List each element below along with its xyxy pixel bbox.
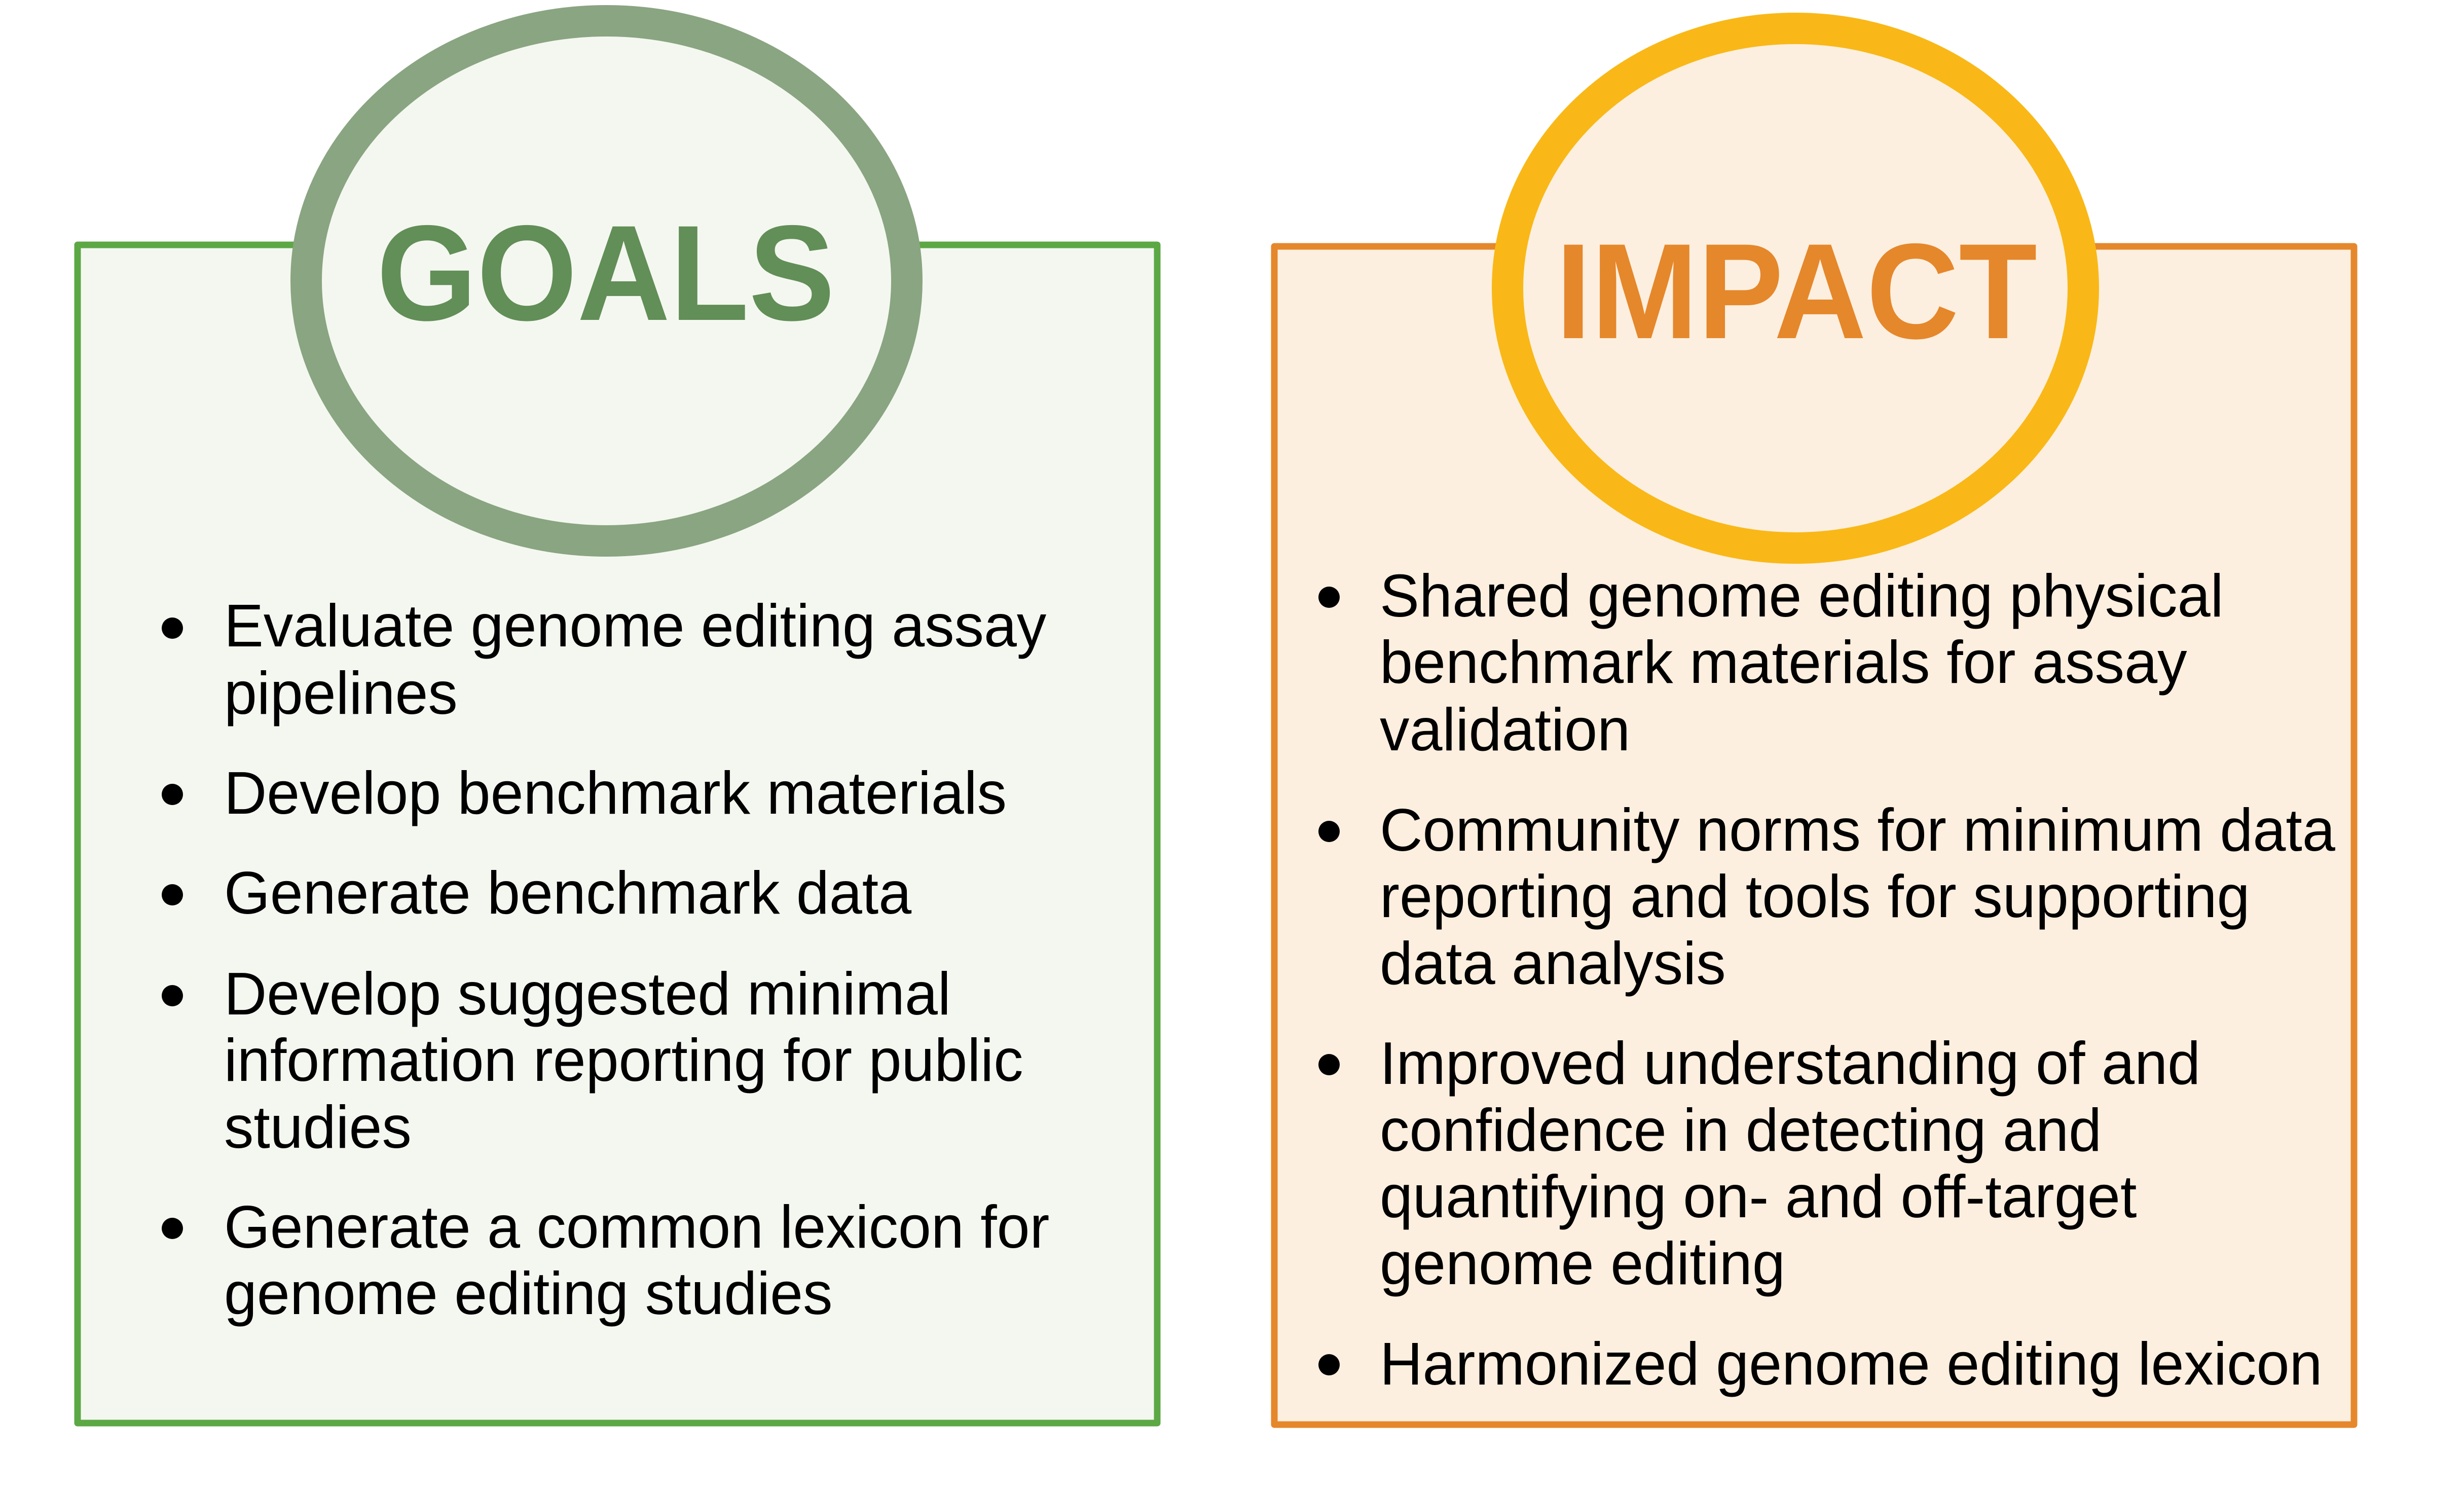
impact 1: Shared genome editing physical: [1380, 562, 2224, 630]
impact 2: data analysis: [1380, 930, 1726, 997]
goal 5: [162, 1193, 1049, 1327]
impact 3: [1318, 1030, 2200, 1297]
goal 5: Generate a common lexicon for: [224, 1193, 1049, 1260]
goal 4: [162, 960, 1023, 1160]
impact heading badge: [1507, 28, 2083, 548]
impact 1: validation: [1380, 696, 1630, 763]
goal 1: [162, 592, 1046, 726]
panel: goals: [78, 21, 1157, 1423]
goal 4: information reporting for public: [224, 1026, 1023, 1094]
goal 4: studies: [224, 1093, 412, 1160]
goal 4: Develop suggested minimal: [224, 960, 951, 1027]
goal 1: Evaluate genome editing assay: [224, 592, 1046, 659]
goals heading badge: [306, 21, 907, 541]
goals bullet list: [162, 592, 1049, 1327]
impact 2: reporting and tools for supporting: [1380, 863, 2250, 930]
goals panel box: [78, 245, 1157, 1423]
panel: impact: [1274, 28, 2354, 1425]
goals heading badge: GOALS: [377, 198, 835, 349]
impact heading badge: IMPACT: [1556, 215, 2037, 368]
goal 3: Generate benchmark data: [224, 859, 912, 926]
impact 1: [1318, 562, 2224, 763]
impact panel box: [1274, 246, 2354, 1425]
impact 2: [1318, 796, 2335, 997]
impact bullet list: [1318, 562, 2335, 1398]
impact 1: benchmark materials for assay: [1380, 629, 2187, 696]
impact 4: Harmonized genome editing lexicon: [1380, 1330, 2323, 1398]
goal 5: genome editing studies: [224, 1259, 832, 1327]
goal 2: Develop benchmark materials: [224, 759, 1007, 826]
impact 3: confidence in detecting and: [1380, 1097, 2102, 1164]
impact 3: genome editing: [1380, 1230, 1785, 1297]
impact 2: Community norms for minimum data: [1380, 796, 2335, 864]
goal 1: pipelines: [224, 659, 458, 726]
impact 3: Improved understanding of and: [1380, 1030, 2200, 1097]
impact 3: quantifying on- and off-target: [1380, 1163, 2137, 1230]
